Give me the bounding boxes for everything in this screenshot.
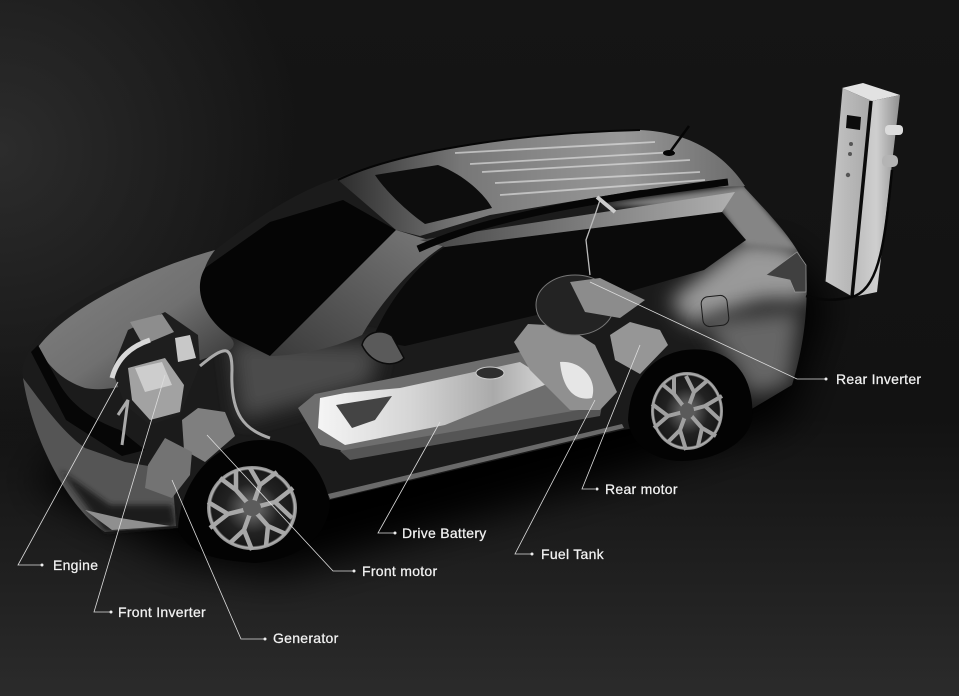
roof rail bbox=[418, 182, 728, 249]
callout: Drive Battery: Drive Battery bbox=[402, 525, 487, 541]
fuel tank bbox=[514, 324, 617, 410]
callout: Rear Inverter: Rear Inverter bbox=[836, 371, 921, 387]
callout: Generator: Generator bbox=[273, 630, 339, 646]
callout: Front motor: Front motor bbox=[362, 563, 437, 579]
grille and headlight bbox=[31, 345, 145, 456]
antenna base bbox=[663, 150, 675, 156]
front motor bbox=[182, 408, 235, 462]
lower intake bbox=[85, 510, 170, 530]
charger front bbox=[825, 88, 872, 297]
charging cable in car bbox=[586, 200, 600, 275]
sunroof bbox=[375, 165, 492, 224]
roof stripes bbox=[455, 142, 705, 195]
callout: Front Inverter bbox=[94, 375, 206, 620]
callout: Drive Battery bbox=[378, 422, 487, 541]
callout: Generator bbox=[172, 480, 339, 646]
generator bbox=[145, 438, 192, 498]
callout: Fuel Tank: Fuel Tank bbox=[541, 546, 605, 562]
indicator buttons bbox=[846, 142, 853, 177]
tank highlight bbox=[560, 362, 593, 399]
callout: Front motor bbox=[207, 435, 437, 579]
callout: Rear Inverter bbox=[590, 282, 921, 387]
charging station bbox=[806, 83, 903, 300]
rear wheel arch bbox=[628, 349, 752, 461]
side upper sheen bbox=[230, 340, 380, 420]
hood bbox=[38, 250, 234, 389]
rear quarter highlight bbox=[670, 240, 810, 325]
upper strip above window bbox=[420, 192, 735, 247]
ground shadow bbox=[30, 250, 830, 575]
connector handles bbox=[882, 125, 903, 167]
front wheel arch bbox=[178, 440, 330, 563]
rear wheel bbox=[651, 372, 723, 450]
callout: Rear motor bbox=[582, 345, 678, 497]
fuel door bbox=[701, 295, 729, 327]
high-voltage conduit bbox=[200, 351, 270, 438]
roof bbox=[338, 130, 745, 236]
antenna bbox=[670, 126, 689, 152]
rear motor bbox=[610, 322, 668, 374]
A pillar and windscreen reflection bbox=[270, 230, 445, 356]
bumper shade bbox=[60, 470, 176, 532]
callouts bbox=[18, 282, 921, 646]
windshield bbox=[200, 200, 396, 356]
side windows bbox=[372, 212, 746, 346]
charger side bbox=[853, 95, 900, 297]
callout: Engine bbox=[18, 382, 118, 573]
charge connector bbox=[597, 197, 615, 212]
roof top edge bbox=[338, 130, 640, 180]
charging cable bbox=[806, 170, 892, 300]
taillight bbox=[766, 252, 806, 292]
callout: Fuel Tank bbox=[515, 400, 605, 562]
callout: Engine: Engine bbox=[53, 557, 98, 573]
car body bbox=[54, 186, 807, 530]
door mirror bbox=[362, 332, 404, 364]
callout: Rear motor: Rear motor bbox=[605, 481, 678, 497]
charger top bbox=[842, 83, 900, 101]
lower door sill bbox=[328, 424, 624, 499]
front bumper bbox=[23, 378, 176, 532]
car bbox=[0, 120, 820, 563]
engine assembly bbox=[112, 312, 270, 498]
rear inverter housing bbox=[536, 275, 645, 335]
drive battery bbox=[298, 352, 610, 460]
display bbox=[846, 115, 861, 130]
front wheel bbox=[207, 466, 297, 550]
C pillar bbox=[600, 185, 800, 250]
callout: Front Inverter: Front Inverter bbox=[118, 604, 206, 620]
